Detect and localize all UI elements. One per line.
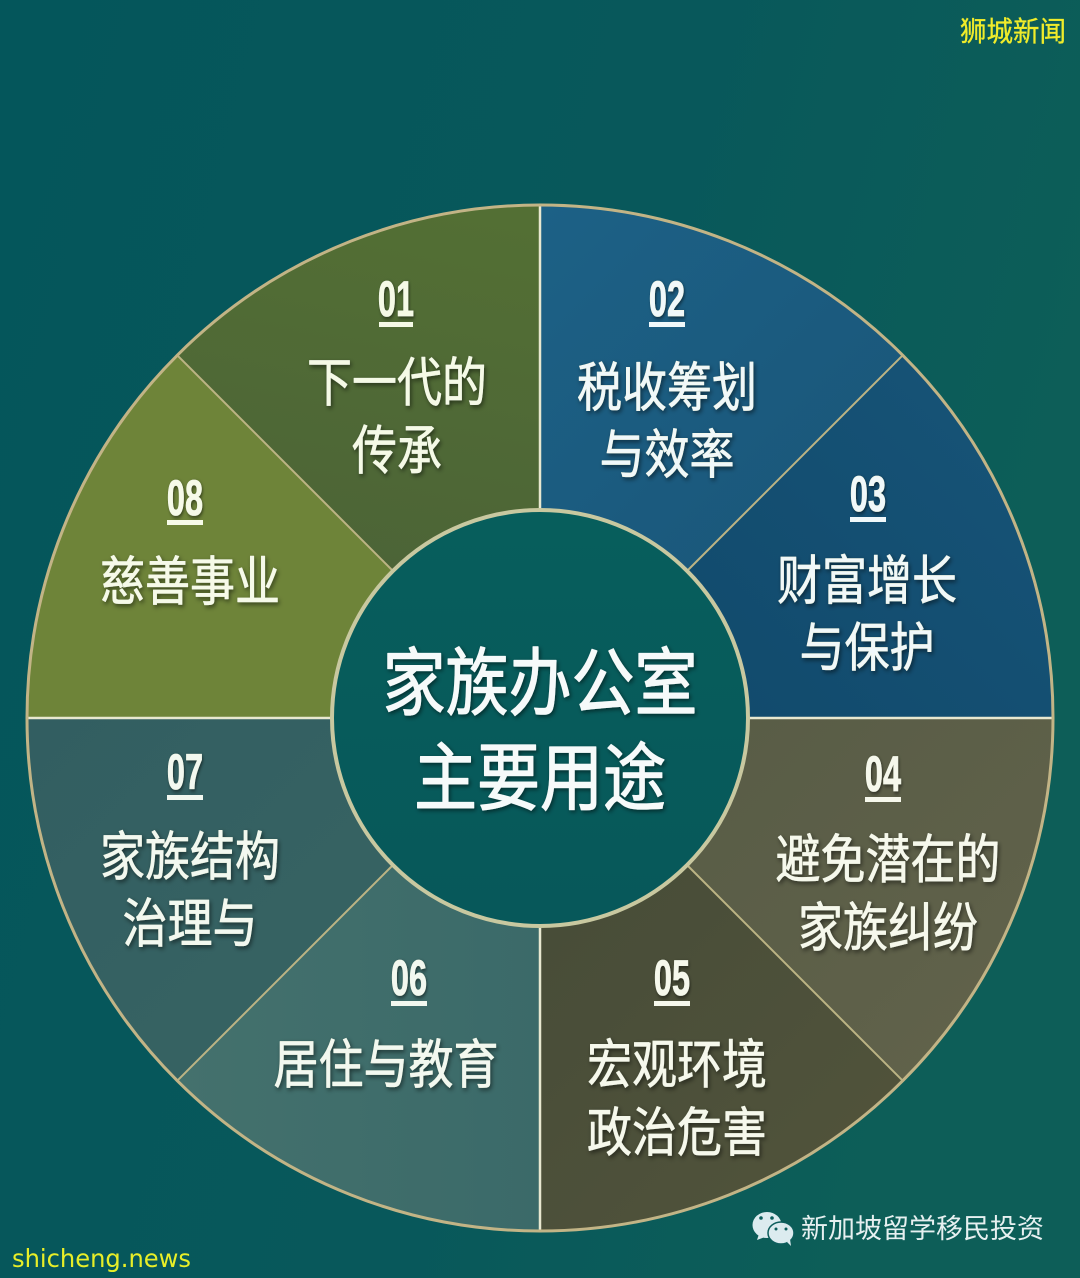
center hub (332, 510, 748, 926)
center title (383, 642, 697, 820)
item 03: 03 (850, 466, 886, 522)
item 02: 税收筹划 (577, 360, 757, 418)
item 06 (274, 950, 498, 1095)
item 02 (577, 271, 757, 485)
item 01: 01 (378, 271, 414, 327)
item 02: 与效率 (600, 427, 734, 485)
item 04: 避免潜在的 (776, 832, 1000, 890)
watermark: top right: 狮城新闻 (960, 15, 1066, 47)
segment 05 (540, 865, 903, 1231)
item 07: 治理与 (123, 896, 257, 954)
item 01 (307, 271, 487, 481)
segment 02 (540, 205, 903, 571)
item 02: 02 (649, 271, 685, 327)
segment 07 (27, 718, 393, 1081)
item 08: 慈善事业 (100, 554, 280, 612)
item 08 (100, 470, 280, 612)
item 05: 政治危害 (587, 1105, 767, 1163)
item 06: 居住与教育 (274, 1037, 498, 1095)
item 04 (776, 746, 1000, 958)
account name: 新加坡留学移民投资 (801, 1214, 1044, 1244)
item 05: 05 (654, 950, 690, 1006)
item 06: 06 (391, 950, 427, 1006)
item 08: 08 (167, 470, 203, 526)
segment 01 (177, 205, 540, 571)
item 05 (587, 950, 767, 1163)
item 07: 家族结构 (100, 829, 280, 887)
item 01: 下一代的 (307, 355, 487, 413)
icon: WeChat bubbles (752, 1212, 794, 1246)
item 04: 04 (865, 746, 901, 802)
item 03: 财富增长 (777, 553, 957, 611)
center title: 主要用途 (414, 737, 666, 820)
item 03: 与保护 (800, 620, 934, 678)
item 07 (100, 744, 280, 954)
segment 08 (27, 355, 393, 718)
watermark: WeChat account (752, 1212, 1044, 1246)
center title: 家族办公室 (383, 642, 697, 725)
segment 03 (687, 355, 1053, 718)
segment 06 (177, 865, 540, 1231)
item 03 (777, 466, 957, 678)
item 01: 传承 (352, 423, 442, 481)
segment 04 (687, 718, 1053, 1081)
item 07: 07 (167, 744, 203, 800)
watermark: bottom left: shicheng.news (12, 1244, 191, 1273)
wheel: family office uses (27, 205, 1053, 1231)
item 04: 家族纠纷 (798, 900, 978, 958)
item 05: 宏观环境 (587, 1037, 767, 1095)
